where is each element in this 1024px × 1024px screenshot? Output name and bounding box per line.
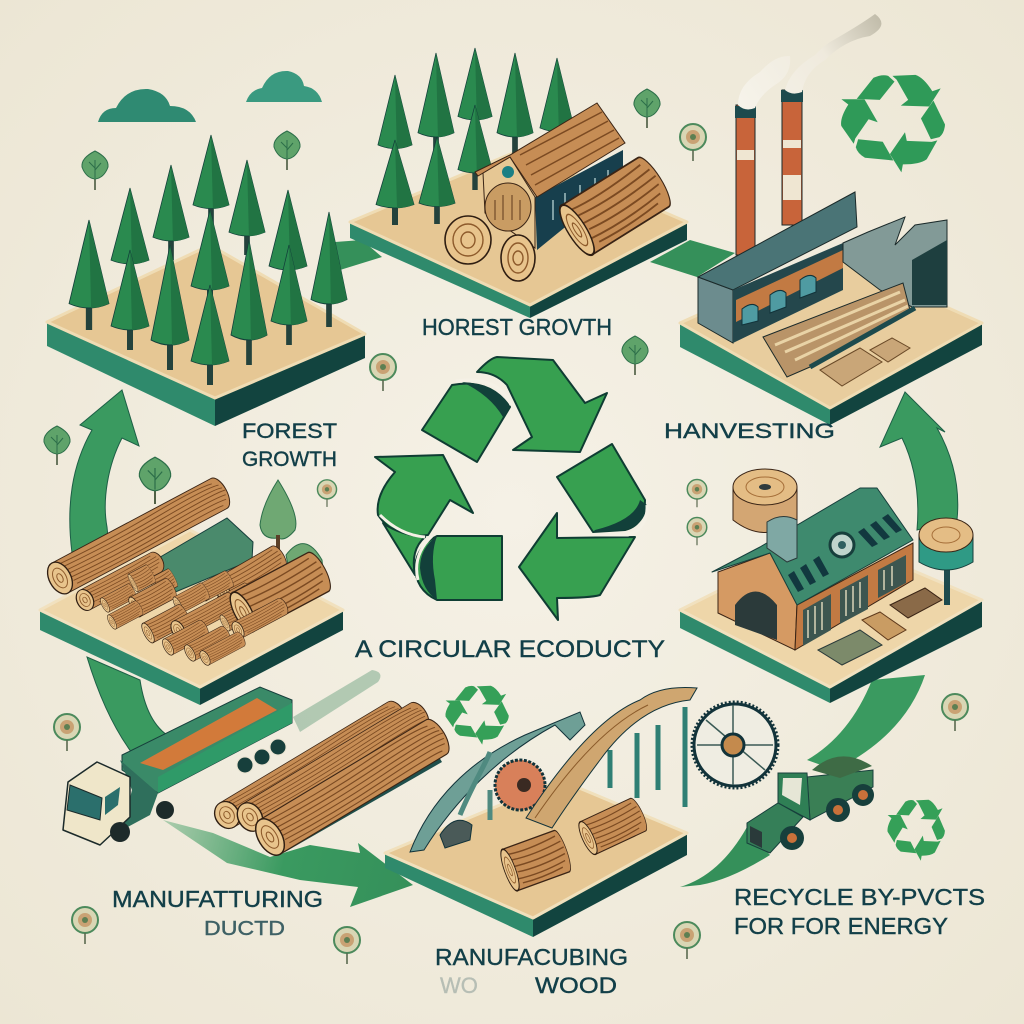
label: forest: FOREST [242, 420, 337, 443]
label: horest growth: HOREST GROVTH [422, 314, 612, 340]
green tank [150, 518, 253, 593]
panel: harvesting platform [350, 48, 687, 318]
recycling icon top right [829, 75, 956, 179]
icon: ring top right [680, 124, 706, 161]
label: harvesting: HANVESTING [664, 420, 835, 443]
sawmill barn [475, 103, 625, 250]
wood spool [733, 469, 797, 532]
icon: ring near log pile [317, 480, 337, 507]
faded arrow shadow behind truck [293, 670, 380, 732]
barn building [712, 488, 913, 650]
icon: sapling upper left [274, 131, 300, 170]
icon: ring bottom centre [334, 927, 360, 964]
small green truck [747, 756, 874, 853]
icon: cloud left [98, 89, 196, 122]
icon: sapling left [44, 426, 70, 465]
label: manufacturing: MANUFATTURING [112, 886, 323, 912]
top trees [376, 48, 574, 225]
icon: sapling upper left 2 [82, 151, 108, 190]
label: ranufacubing: RANUFACUBING [435, 944, 628, 970]
big logs [210, 698, 454, 860]
central recycling symbol [375, 357, 647, 620]
lumber on platform [818, 588, 942, 665]
cut timber [497, 796, 650, 893]
machine drum [919, 518, 973, 605]
clouds [98, 71, 322, 122]
label: ducted: DUCTD [204, 918, 285, 940]
circular saw arch [410, 712, 585, 852]
panel: barn platform [680, 469, 982, 703]
arrow: right lower arc [807, 675, 925, 770]
label: wood: WOOD [535, 973, 617, 998]
conveyor ramp [526, 688, 697, 828]
icon: ring middle [370, 354, 396, 391]
recycling icon bottom centre [438, 686, 516, 749]
label: circular economy: A CIRCULAR ECODUCTY [355, 636, 665, 663]
panel: log pile platform [40, 457, 343, 705]
small decorative icons [44, 89, 968, 964]
log pile [73, 543, 335, 667]
panel: factory platform [680, 192, 982, 425]
arrow: left lower arc [87, 657, 170, 753]
label: faded wo: WO [440, 973, 478, 998]
smoke [738, 14, 881, 109]
saw wheel [692, 702, 778, 788]
panel: forest platform [47, 135, 365, 426]
recycling icon bottom right [881, 800, 951, 865]
forest trees [69, 135, 347, 385]
icon: ring right [942, 694, 968, 731]
trees behind logs [139, 457, 322, 590]
arrow: bottom sweep to manufacturing [163, 820, 413, 907]
label: for energy: FOR FOR ENERGY [734, 913, 948, 939]
factory building [698, 192, 947, 386]
panel: manufacturing platform [385, 688, 778, 937]
label: recycle by-products: RECYCLE BY-PVCTS [734, 884, 985, 910]
chimneys [735, 14, 881, 255]
arrow: harvesting to factory connector [650, 240, 735, 277]
icon: ring bottom right [674, 922, 700, 959]
right arrow [519, 444, 647, 620]
left arrow [375, 455, 502, 600]
long log [42, 475, 234, 598]
arrow: manufacturing to truck [680, 827, 770, 887]
arrow: right cycle arc [880, 392, 958, 530]
icon: cloud right [246, 71, 322, 102]
truck with wood load [63, 687, 292, 845]
harvested logs [445, 153, 676, 281]
icon: ring near barn [687, 480, 707, 507]
arrow: left cycle arc [70, 390, 139, 558]
icon: sapling top [634, 89, 660, 128]
icon: ring near barn 2 [687, 518, 707, 545]
icon: ring lower left [54, 714, 80, 751]
icon: sapling middle right [622, 336, 648, 375]
top arrow [422, 357, 607, 462]
label: growth: GROWTH [242, 448, 337, 471]
arrow: forest to harvesting connector [335, 240, 382, 270]
icon: ring bottom left [72, 907, 98, 944]
